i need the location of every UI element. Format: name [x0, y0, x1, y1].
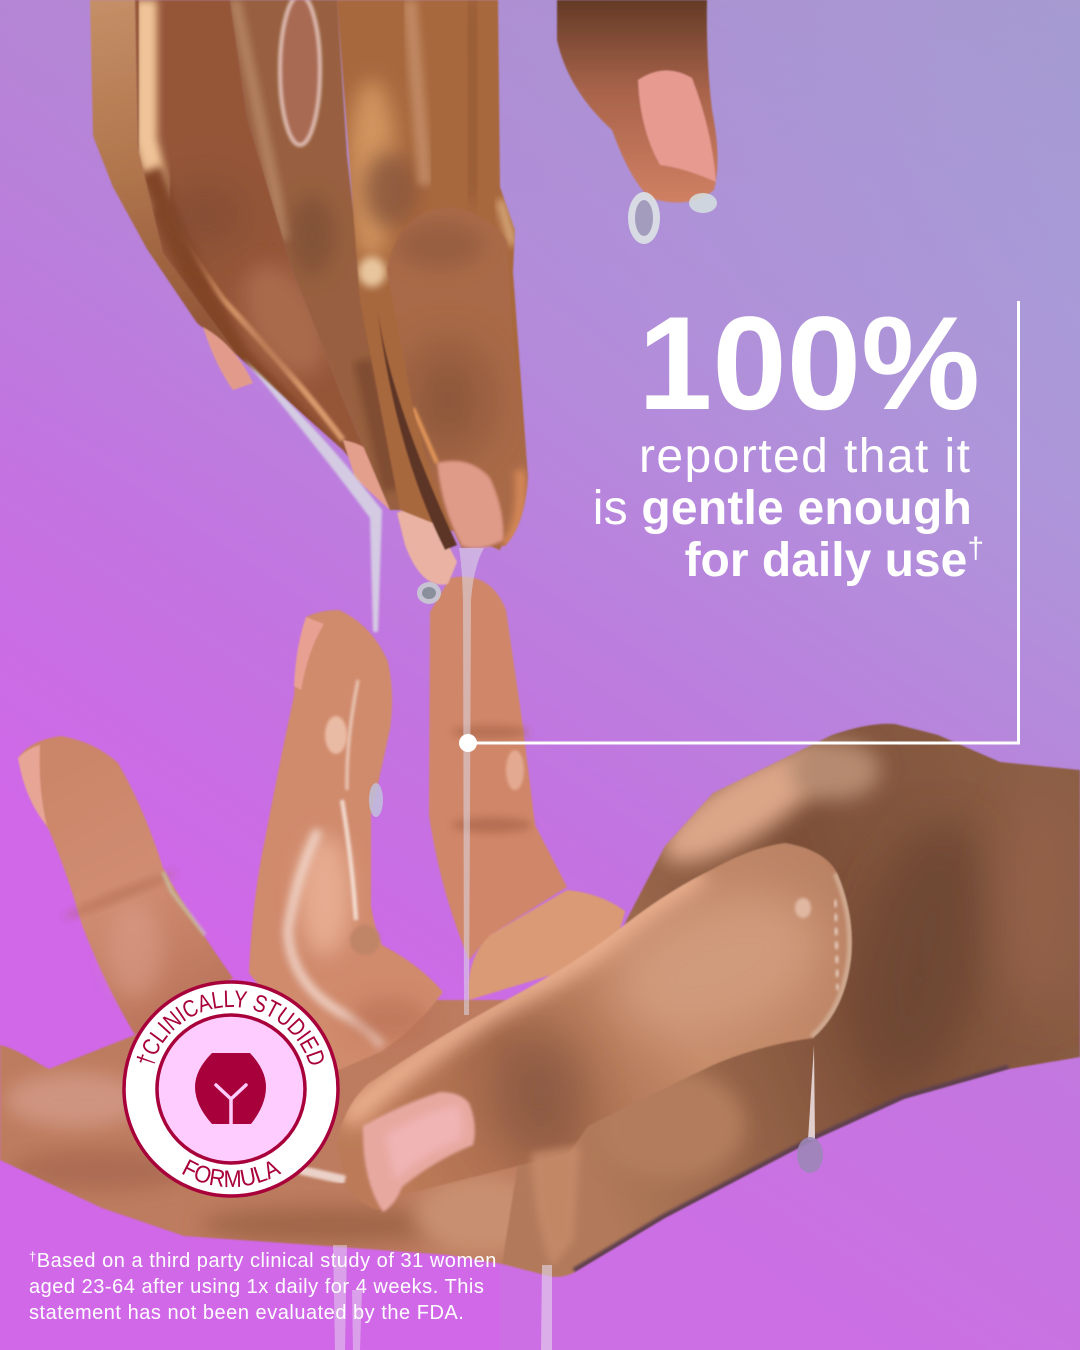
- footnote: aged 23-64 after using 1x daily for 4 weeks. This: [29, 1276, 484, 1298]
- footnote: †: [29, 1249, 37, 1264]
- big thumbnail: [363, 1092, 475, 1212]
- photo: lower hand: [0, 577, 1080, 1300]
- gel drips and droplets: [243, 192, 823, 1350]
- statement text: †: [967, 532, 984, 565]
- left fingernail: [18, 745, 47, 826]
- gel sliver beside thumb: [377, 307, 457, 550]
- statement text: [593, 430, 984, 587]
- finger: back of hand: [330, 0, 540, 560]
- finger: middle: [429, 577, 567, 960]
- fingernail: [638, 70, 716, 182]
- finger: ring with gel: [249, 610, 443, 1074]
- statistic: 100%: 100%: [638, 290, 980, 438]
- palm bulb: [468, 890, 625, 1000]
- statement text: reported that it: [639, 430, 970, 483]
- badge text bottom: FORMULA: [182, 1159, 282, 1188]
- statement text: is gentle enough: [593, 482, 972, 535]
- finger: thumb: [387, 208, 529, 548]
- finger: left: [18, 736, 233, 1035]
- finger: index: [134, 0, 364, 457]
- palm: [0, 999, 518, 1265]
- index fingernail: [343, 440, 390, 510]
- finger: middle with gel: [229, 0, 401, 511]
- thumbnail upper: [437, 461, 503, 548]
- badge text top: †CLINICALLY STUDIED: [136, 990, 324, 1064]
- gel under thumb: [531, 1145, 580, 1268]
- badge: clinically studied formula: [122, 980, 340, 1198]
- fingertip gel: [397, 500, 457, 585]
- icon: body: [195, 1053, 266, 1124]
- outer left nail: [203, 327, 253, 390]
- footnote: statement has not been evaluated by the FDA.: [29, 1302, 464, 1324]
- photo: upper hand: [90, 0, 540, 585]
- statement text: for daily use: [685, 534, 967, 587]
- footnote: Based on a third party clinical study of 31 women: [37, 1250, 497, 1272]
- wrist and back of hand: [500, 700, 1080, 1300]
- footnote: [29, 1249, 497, 1324]
- photo: upper right fingertip: [557, 0, 718, 202]
- finger: outer left: [90, 0, 253, 390]
- connector line and dot: [459, 301, 1018, 752]
- big thumb: [342, 842, 853, 1210]
